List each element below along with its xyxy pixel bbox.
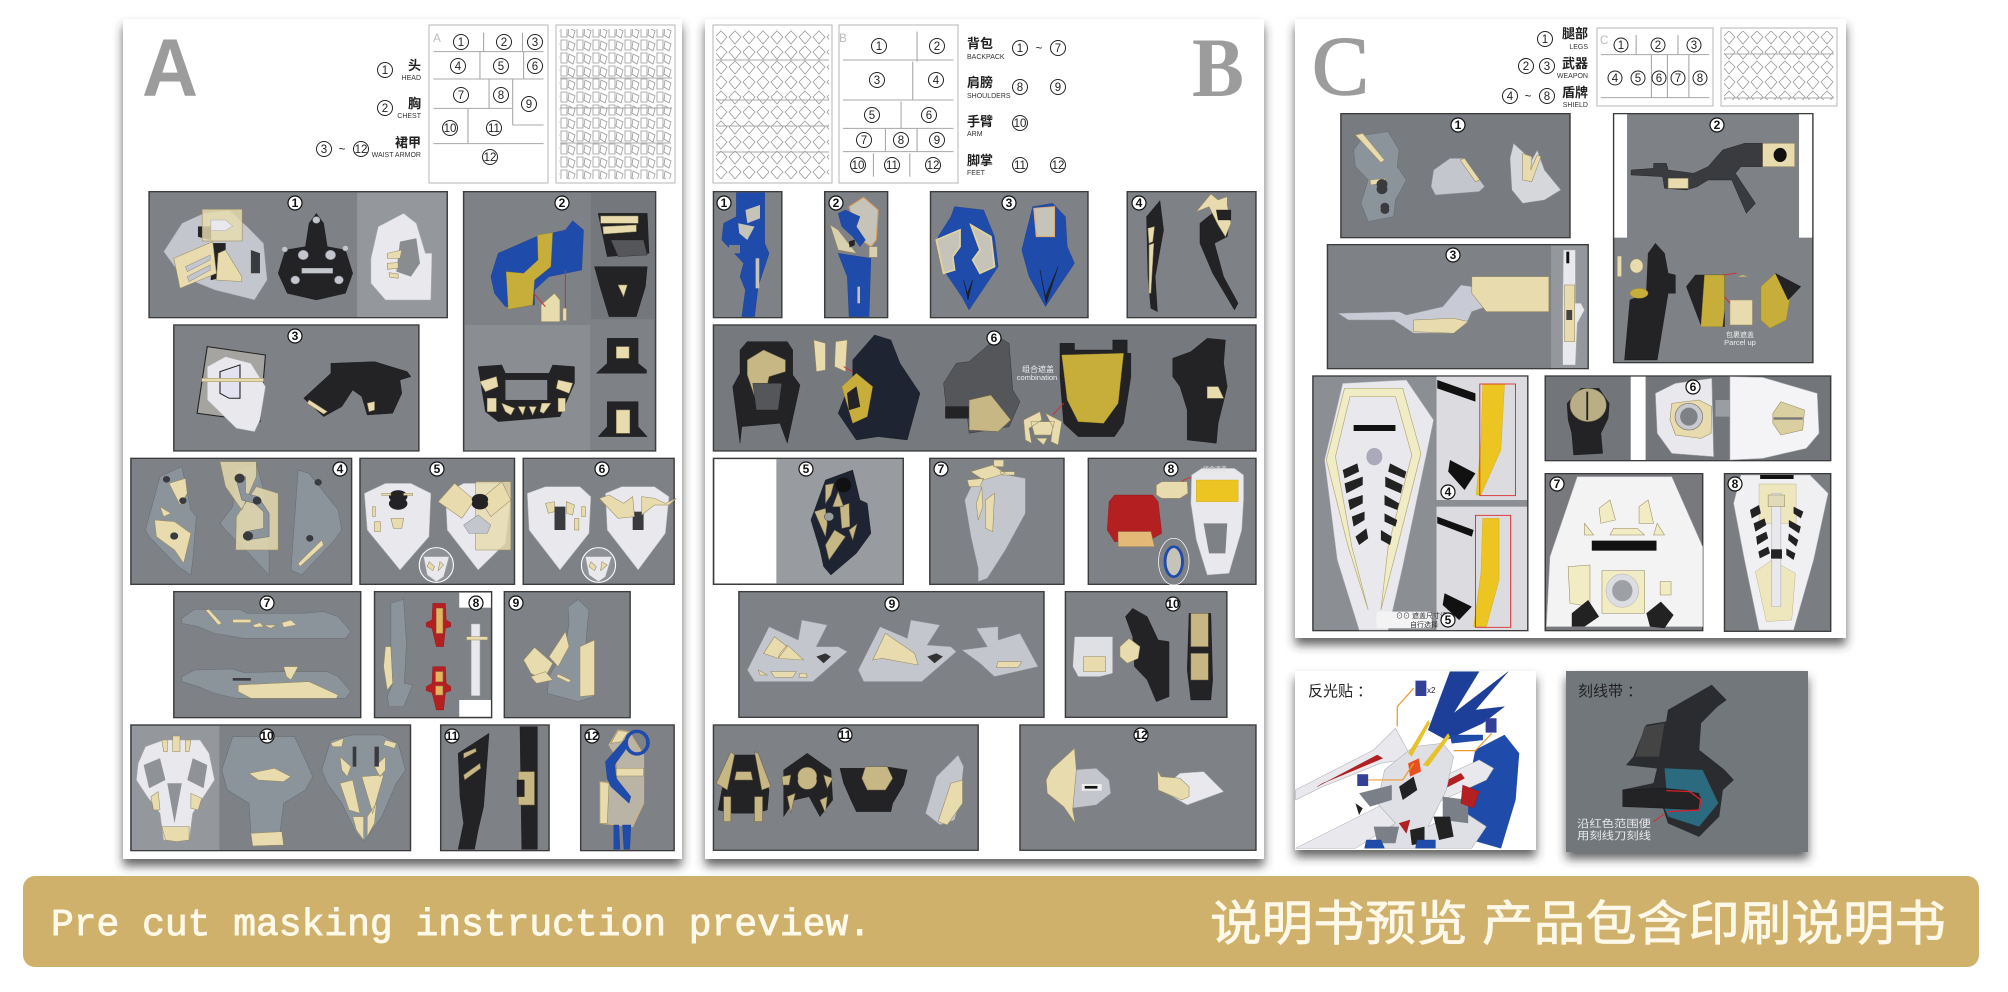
thumbnail: page B layout map: 10 xyxy=(852,160,864,172)
panel: B1 xyxy=(713,192,782,318)
badge 4 xyxy=(1441,485,1455,499)
legend: page A parts: 1 xyxy=(382,65,388,77)
panel: C6 xyxy=(1545,376,1831,461)
legend: page B parts: ARM xyxy=(967,131,983,138)
thumbnail: page A layout map: 4 xyxy=(455,61,462,73)
panel: A2 chest xyxy=(464,192,656,451)
badge 3: 3 xyxy=(1006,196,1013,210)
badge 2 xyxy=(555,196,569,210)
thumbnail: page B layout map xyxy=(839,25,958,183)
legend: page B parts: 9 xyxy=(1055,82,1061,94)
legend: page C parts: 3 xyxy=(1544,61,1550,73)
panel: B7 xyxy=(930,458,1064,584)
thumbnail: page C layout map: 3 xyxy=(1691,40,1697,52)
legend: page A parts: 头 xyxy=(408,58,421,73)
page C xyxy=(1295,19,1846,638)
caption: parcel up cn: 包裹遮盖 xyxy=(1726,330,1754,339)
badge 10: 10 xyxy=(1166,597,1180,611)
thumbnail: page C cut sheet xyxy=(1721,28,1837,106)
caption: combination: 组合遮盖 xyxy=(1203,465,1227,473)
banner english text: Pre cut masking instruction preview. xyxy=(51,904,871,947)
panel: B8 xyxy=(1088,458,1256,585)
badge 11: 11 xyxy=(446,729,459,743)
thumbnail: page C layout map: 2 xyxy=(1655,40,1661,52)
panel: B4 xyxy=(1127,192,1256,318)
thumbnail: page A layout map: 3 xyxy=(532,37,538,49)
thumbnail: page A layout map: 5 xyxy=(498,61,504,73)
legend: page C parts: 4 xyxy=(1507,91,1514,103)
panel: C4 and C5 shield xyxy=(1313,376,1528,631)
badge 1: 1 xyxy=(292,196,299,210)
thumbnail: page A layout map: 9 xyxy=(526,99,532,111)
legend: page B parts: 7 xyxy=(1055,43,1061,55)
badge 2: 2 xyxy=(1714,118,1721,132)
legend: page A parts: WAIST ARMOR xyxy=(372,152,421,159)
badge 8: 8 xyxy=(1732,477,1739,491)
caption: engrave along red: 沿红色范围便 xyxy=(1577,817,1652,830)
page B xyxy=(705,19,1264,859)
panel: A10 xyxy=(131,725,411,851)
panel: A3 xyxy=(174,325,419,451)
caption: combination english: combination xyxy=(1017,373,1057,382)
badge 1 xyxy=(1451,118,1465,132)
legend: page A parts xyxy=(316,58,422,159)
badge 12: 12 xyxy=(585,729,599,743)
legend: page B parts: 手臂 xyxy=(967,114,993,129)
badge 4: 4 xyxy=(1136,196,1143,210)
thumbnail: page B layout map: 12 xyxy=(927,160,939,172)
legend: page B parts: 11 xyxy=(1014,160,1026,172)
thumbnail: page A layout map: 6 xyxy=(532,61,538,73)
panel: B9 xyxy=(739,592,1044,717)
badge 5 xyxy=(430,462,444,476)
legend: page B parts: 8 xyxy=(1017,82,1023,94)
thumbnail: page B layout map: 8 xyxy=(898,135,904,147)
badge 7: 7 xyxy=(1554,477,1561,491)
badge 6 xyxy=(987,331,1001,345)
badge 9: 9 xyxy=(513,596,520,610)
panel: A8 xyxy=(375,592,492,718)
caption: parcel up en: Parcel up xyxy=(1724,338,1756,347)
legend: page C parts: 腿部 xyxy=(1562,26,1588,41)
badge 8: 8 xyxy=(473,596,480,610)
panel: B11 xyxy=(713,725,978,850)
badge 3 xyxy=(288,329,302,343)
badge 6: 6 xyxy=(599,462,606,476)
legend: page C parts xyxy=(1502,26,1588,109)
legend: page C parts: 1 xyxy=(1542,34,1548,46)
legend: page C parts: WEAPON xyxy=(1557,73,1588,80)
panel: A4 xyxy=(131,458,352,584)
legend: page B parts: FEET xyxy=(967,170,986,177)
panel: A12 xyxy=(581,725,674,851)
note: cut size: ⊙⊙ 遮盖尺寸请 xyxy=(1396,611,1447,620)
panel: reflective sticker photo xyxy=(1295,671,1536,850)
thumbnail: page A layout map: 1 xyxy=(458,37,464,49)
badge 8 xyxy=(1728,477,1742,491)
thumbnail: page B layout map: B xyxy=(839,33,847,45)
legend: page B parts: 1 xyxy=(1017,43,1023,55)
badge 3 xyxy=(1446,248,1460,262)
badge 5 xyxy=(1441,613,1455,627)
panel: B12 xyxy=(1020,725,1256,850)
panel: A5 xyxy=(360,458,515,584)
thumbnail: page B layout map: 7 xyxy=(861,135,867,147)
panel: B5 xyxy=(713,458,903,584)
thumbnail: page A layout map: 8 xyxy=(498,90,504,102)
thumbnail: page B layout map: 11 xyxy=(886,160,898,172)
legend: page B parts: ~ xyxy=(1036,43,1043,55)
panel: C1 xyxy=(1341,114,1570,238)
badge 4: 4 xyxy=(337,462,344,476)
legend: page B parts: SHOULDERS xyxy=(967,93,1011,100)
thumbnail: page A layout map: 12 xyxy=(484,152,496,164)
thumbnail: page C layout map: 1 xyxy=(1618,40,1624,52)
thumbnail: page A cut sheet xyxy=(556,25,675,183)
legend: page A parts: ~ xyxy=(339,144,346,156)
label: reflective sticker: 反光贴 ： xyxy=(1308,683,1372,700)
thumbnail: page B cut sheet xyxy=(713,25,832,183)
panel: B2 xyxy=(825,192,888,318)
thumbnail: page B layout map: 1 xyxy=(876,41,882,53)
badge 4: 4 xyxy=(1445,485,1452,499)
thumbnail: page C layout map: 8 xyxy=(1697,73,1703,85)
badge 7 xyxy=(1550,477,1564,491)
badge 3: 3 xyxy=(1450,248,1457,262)
badge 6 xyxy=(595,462,609,476)
heading: letter A: A xyxy=(142,23,198,114)
badge 6 xyxy=(1686,380,1700,394)
thumbnail: page C layout map: 4 xyxy=(1612,73,1619,85)
legend: page C parts: 盾牌 xyxy=(1562,85,1588,100)
badge 11: 11 xyxy=(839,728,852,742)
badge 1: 1 xyxy=(1455,118,1462,132)
legend: page B parts xyxy=(967,36,1066,177)
legend: page C parts: 武器 xyxy=(1562,56,1588,71)
badge 1: 1 xyxy=(721,196,728,210)
thumbnail: page B layout map: 4 xyxy=(933,75,940,87)
badge 8: 8 xyxy=(1168,462,1175,476)
panel: A11 xyxy=(441,725,549,851)
legend: page A parts: 2 xyxy=(382,103,388,115)
banner chinese text: 说明书预览 产品包含印刷说明书 xyxy=(1210,898,1946,951)
badge 12: 12 xyxy=(1134,728,1148,742)
thumbnail: page A layout map: A xyxy=(433,33,441,45)
badge 7 xyxy=(260,596,274,610)
legend: page A parts: 胸 xyxy=(408,96,421,111)
panel: C8 xyxy=(1725,474,1831,631)
panel: C2 weapon xyxy=(1614,114,1813,363)
thumbnail: page A layout map: 10 xyxy=(444,123,456,135)
label: engraving tape: 刻线带 ： xyxy=(1578,683,1642,700)
badge 3: 3 xyxy=(292,329,299,343)
legend: page A parts: HEAD xyxy=(402,75,421,82)
badge 9 xyxy=(885,597,899,611)
panel: A6 xyxy=(523,458,676,584)
panel: B10 xyxy=(1065,592,1227,717)
badge 6: 6 xyxy=(991,331,998,345)
thumbnail: page C layout map: 6 xyxy=(1656,73,1662,85)
thumbnail: page B layout map: 3 xyxy=(874,75,880,87)
panel: C3 xyxy=(1327,245,1588,369)
legend: page A parts: CHEST xyxy=(397,113,422,120)
badge 8 xyxy=(1164,462,1178,476)
thumbnail: page B layout map: 9 xyxy=(934,135,940,147)
badge 6: 6 xyxy=(1690,380,1697,394)
thumbnail: page A layout map: 2 xyxy=(501,37,507,49)
badge 9: 9 xyxy=(889,597,896,611)
legend: page C parts: LEGS xyxy=(1569,44,1588,51)
thumbnail: page A layout map: 7 xyxy=(458,90,464,102)
legend: page B parts: BACKPACK xyxy=(967,54,1005,61)
thumbnail: page B layout map: 5 xyxy=(869,110,875,122)
heading: letter B: B xyxy=(1192,21,1244,115)
badge 7: 7 xyxy=(938,462,945,476)
legend: page B parts: 12 xyxy=(1052,160,1064,172)
badge 3 xyxy=(1002,196,1016,210)
panel: C7 xyxy=(1545,474,1703,631)
legend: page B parts: 肩膀 xyxy=(967,75,993,90)
thumbnail: page C layout map: 5 xyxy=(1635,73,1641,85)
badge 4 xyxy=(333,462,347,476)
badge 2: 2 xyxy=(559,196,566,210)
legend: page B parts: 背包 xyxy=(967,36,993,51)
legend: page C parts: ~ xyxy=(1525,91,1532,103)
badge 7: 7 xyxy=(264,596,271,610)
badge 2 xyxy=(1710,118,1724,132)
heading: letter C: C xyxy=(1312,20,1369,113)
panel: engraving tape photo xyxy=(1566,671,1808,852)
badge 5: 5 xyxy=(434,462,441,476)
thumbnail: page C layout map: 7 xyxy=(1675,73,1681,85)
legend: page B parts: 10 xyxy=(1014,118,1026,130)
legend: page C parts: SHIELD xyxy=(1563,102,1588,109)
badge 2: 2 xyxy=(833,196,840,210)
panel: A9 xyxy=(504,592,630,718)
thumbnail: page C layout map xyxy=(1597,28,1713,106)
caption: combination: 组合遮盖 xyxy=(1022,364,1054,374)
legend: page A parts: 12 xyxy=(355,144,367,156)
panel: A1 head xyxy=(149,192,447,318)
badge 1 xyxy=(288,196,302,210)
badge 5: 5 xyxy=(803,462,810,476)
panel: B3 xyxy=(931,192,1088,318)
badge 5: 5 xyxy=(1445,613,1452,627)
badge 5 xyxy=(799,462,813,476)
legend: page C parts: 8 xyxy=(1544,91,1550,103)
caption: with engraving knife: 用刻线刀刻线 xyxy=(1577,829,1652,842)
legend: page C parts: 2 xyxy=(1523,61,1529,73)
label: x2: x2 xyxy=(1427,686,1436,695)
thumbnail: page A layout map xyxy=(429,25,548,183)
thumbnail: page A layout map: 11 xyxy=(488,123,500,135)
page A xyxy=(123,19,682,859)
note: cut size line 2: 自行选择 xyxy=(1396,620,1438,629)
panel: A7 xyxy=(174,592,361,718)
legend: page B parts: 脚掌 xyxy=(967,153,993,168)
legend: page A parts: 3 xyxy=(321,144,327,156)
thumbnail: page B layout map: 6 xyxy=(926,110,932,122)
panel: B6 backpack xyxy=(713,325,1256,451)
banner xyxy=(23,876,1979,967)
badge 10: 10 xyxy=(260,729,274,743)
legend: page A parts: 裙甲 xyxy=(395,135,421,150)
thumbnail: page C layout map: C xyxy=(1600,35,1608,47)
thumbnail: page B layout map: 2 xyxy=(934,41,940,53)
